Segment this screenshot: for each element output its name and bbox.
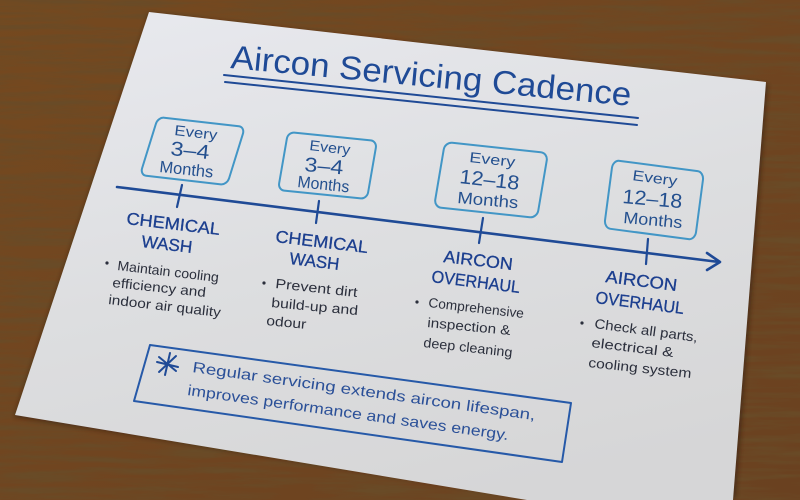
timeline arrow (117, 187, 720, 270)
icon: asterisk (157, 353, 178, 375)
description 3: inspection & (427, 315, 511, 338)
interval box 3 (434, 142, 548, 218)
interval box 3: Every (469, 150, 517, 171)
interval box 2: 3–4 (304, 154, 344, 179)
interval box 3: 12–18 (458, 166, 521, 195)
tick 4 (646, 239, 648, 264)
heading 2: WASH (289, 249, 340, 274)
heading 2 (275, 227, 369, 274)
heading 3: OVERHAUL (431, 267, 521, 297)
heading 3 (431, 247, 521, 297)
heading 1: WASH (141, 232, 193, 257)
milestone 1: chemical wash (105, 117, 245, 320)
title: Aircon Servicing Cadence (229, 38, 633, 113)
interval box 1: Months (159, 158, 214, 182)
description 2: Prevent dirt (275, 276, 359, 300)
description 1: indoor air quality (108, 292, 222, 320)
interval box 3: Months (457, 189, 519, 212)
description 4: cooling system (588, 355, 692, 381)
description 4: electrical & (591, 335, 674, 360)
milestone 3: aircon overhaul (415, 142, 548, 360)
description 3: Comprehensive (428, 295, 525, 321)
milestone 4: aircon overhaul (580, 160, 704, 381)
heading 2: CHEMICAL (275, 227, 369, 257)
heading 4: AIRCON (604, 267, 678, 295)
interval box 1: Every (174, 123, 219, 144)
description 2 (262, 276, 359, 332)
heading 3: AIRCON (443, 247, 514, 274)
heading 1: CHEMICAL (126, 209, 221, 239)
interval box 4: 12–18 (622, 186, 683, 213)
tick 3 (479, 218, 483, 243)
description 1 (105, 258, 222, 320)
heading 4 (595, 267, 685, 318)
interval box 1 (140, 117, 245, 185)
description 4 (580, 316, 699, 381)
description 2: odour (266, 313, 308, 332)
callout text: Regular servicing extends aircon lifespan, (191, 359, 536, 424)
tick 2 (316, 201, 319, 223)
description 1: efficiency and (112, 275, 207, 300)
description 1: Maintain cooling (117, 258, 220, 285)
interval box 2 (278, 132, 377, 199)
interval box 4 (604, 160, 704, 240)
description 3: deep cleaning (423, 335, 513, 360)
interval box 2: Every (309, 138, 352, 159)
callout text (186, 359, 536, 444)
heading 1 (126, 209, 221, 257)
description 3 (415, 295, 525, 360)
interval box 4: Every (631, 168, 679, 190)
interval box 1: 3–4 (169, 138, 211, 164)
description 4: Check all parts, (594, 316, 699, 345)
interval box 4: Months (623, 209, 683, 232)
milestone 2: chemical wash (262, 132, 377, 332)
tick 1 (177, 185, 182, 207)
interval box 2: Months (297, 173, 350, 196)
callout: servicing benefits (134, 345, 571, 462)
description 2: build-up and (271, 295, 359, 318)
callout text: improves performance and saves energy. (186, 382, 510, 444)
heading 4: OVERHAUL (595, 288, 685, 318)
